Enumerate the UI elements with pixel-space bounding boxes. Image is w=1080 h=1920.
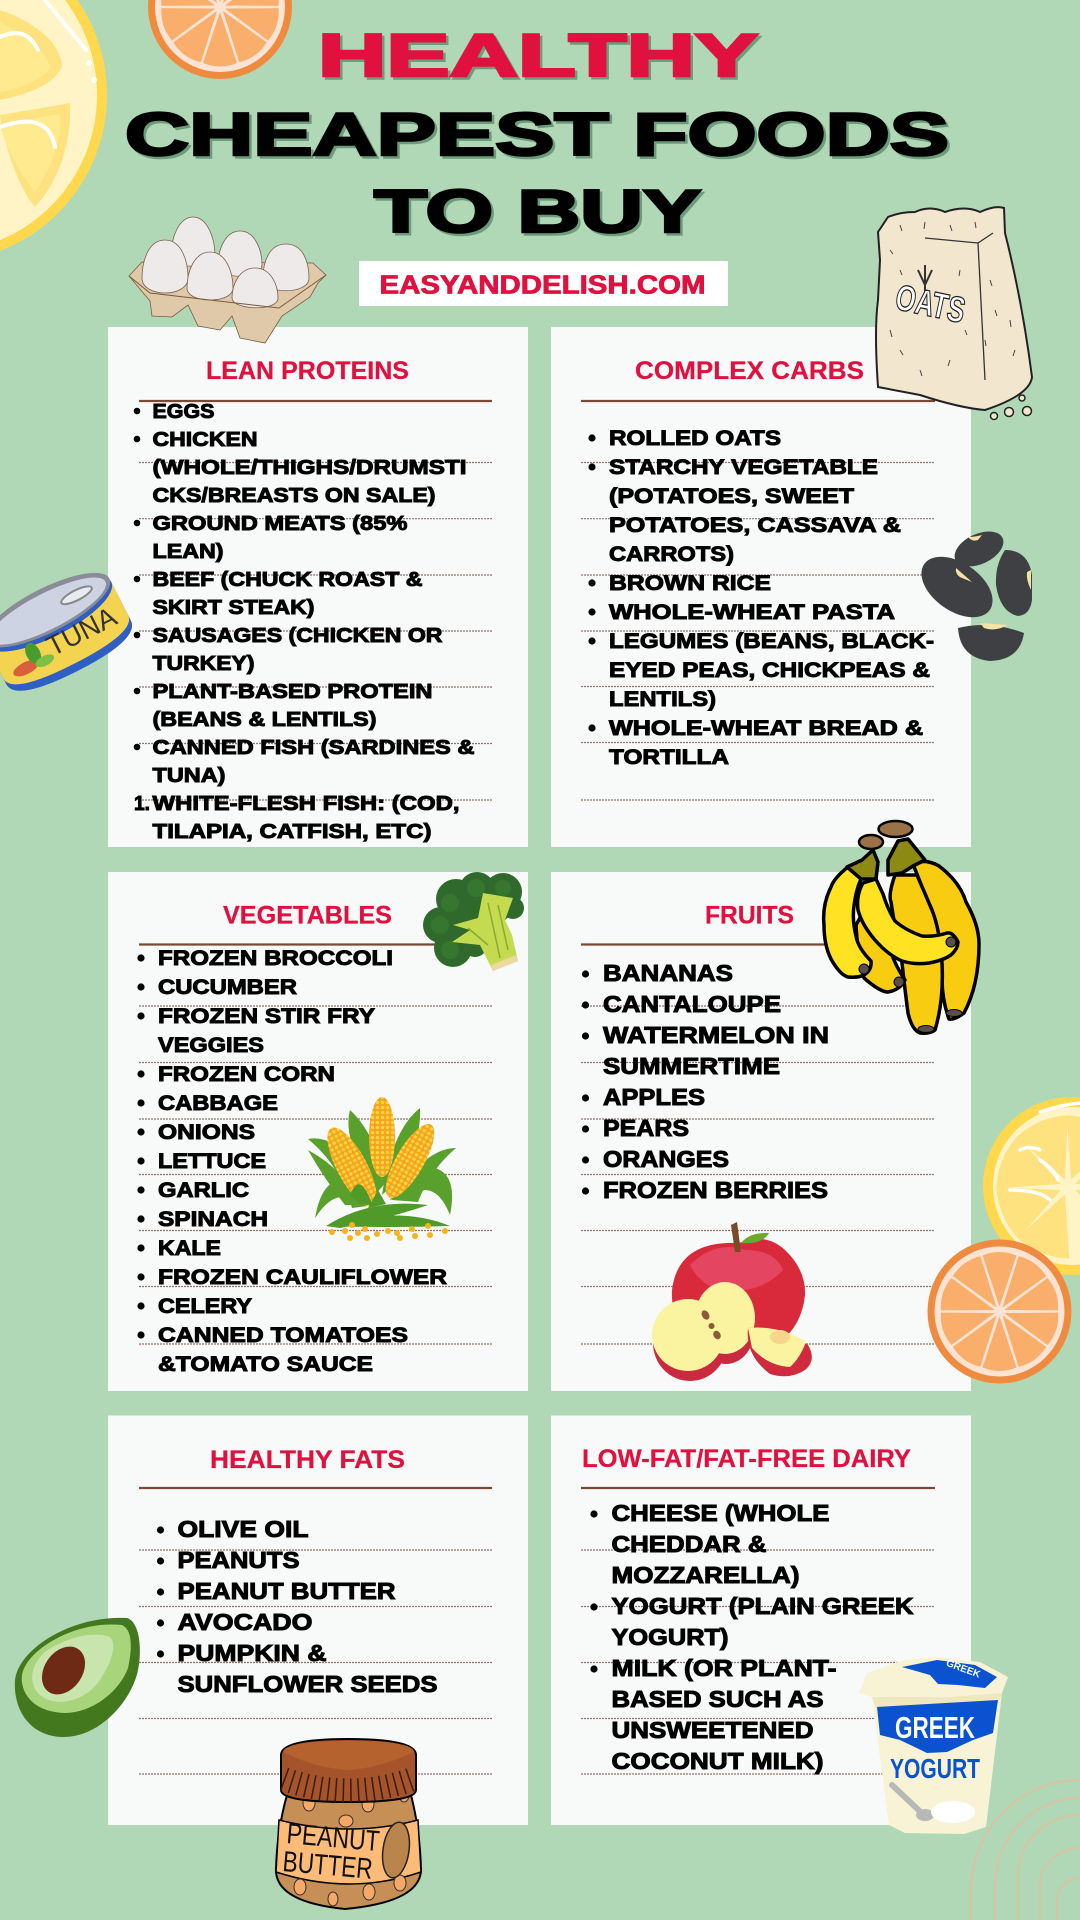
list: lean proteins: WHITE-FLESH FISH: (COD, (152, 792, 460, 815)
list: lean proteins: (WHOLE/THIGHS/DRUMSTI (152, 456, 466, 479)
list: fruits: APPLES (603, 1084, 705, 1110)
title: HEALTHY (320, 24, 760, 92)
list: lean proteins: SAUSAGES (CHICKEN OR (152, 624, 443, 647)
icon: peanut butter jar (276, 1739, 421, 1909)
icon: corn (308, 1097, 456, 1241)
list: lean proteins: TUNA) (152, 764, 226, 787)
list: complex carbs: TORTILLA (609, 745, 729, 769)
list: vegetables: LETTUCE (158, 1149, 266, 1173)
label: butter: BUTTER (281, 1846, 374, 1886)
list: lean proteins: TURKEY) (152, 652, 254, 675)
list: lean proteins: CKS/BREASTS ON SALE) (152, 484, 436, 507)
list: vegetables: FROZEN STIR FRY (158, 1004, 375, 1028)
list: healthy fats: AVOCADO (178, 1609, 312, 1635)
label: lid greek: GREEK (944, 1658, 982, 1681)
list: lean proteins: EGGS (152, 400, 214, 423)
list: complex carbs: CARROTS) (609, 542, 734, 566)
icon: orange slice right (928, 1240, 1072, 1384)
icon: orange slice top (148, 0, 292, 79)
list: low-fat dairy: COCONUT MILK) (612, 1748, 824, 1774)
list: low-fat dairy: BASED SUCH AS (612, 1686, 824, 1712)
list: low-fat dairy (590, 1500, 914, 1774)
list: fruits: WATERMELON IN (603, 1022, 829, 1048)
list: vegetables: &TOMATO SAUCE (158, 1352, 373, 1376)
list: vegetables: ONIONS (158, 1120, 255, 1144)
list: complex carbs: EYED PEAS, CHICKPEAS & (609, 658, 930, 682)
list: vegetables: SPINACH (158, 1207, 268, 1231)
list: vegetables: CANNED TOMATOES (158, 1323, 408, 1347)
list: lean proteins: 1. (134, 792, 150, 815)
list: vegetables: KALE (158, 1236, 221, 1260)
icon: egg carton (129, 217, 326, 343)
website badge: EASYANDDELISH.COM (380, 270, 706, 300)
panel: fruits (551, 872, 971, 1391)
list: low-fat dairy: MILK (OR PLANT- (612, 1655, 836, 1681)
list: low-fat dairy: UNSWEETENED (612, 1717, 814, 1743)
icon: broccoli (423, 872, 524, 971)
panel: vegetables (108, 872, 528, 1391)
list: complex carbs: LENTILS) (609, 687, 716, 711)
heading: fruits: FRUITS (705, 902, 794, 930)
label: peanut: PEANUT (285, 1818, 381, 1858)
icon: lemon slice top left (0, 0, 107, 262)
list: vegetables: CELERY (158, 1294, 252, 1318)
list: lean proteins: BEEF (CHUCK ROAST & (152, 568, 423, 591)
list: complex carbs: WHOLE-WHEAT PASTA (609, 600, 895, 624)
list: lean proteins: GROUND MEATS (85% (152, 512, 408, 535)
list: complex carbs: (POTATOES, SWEET (609, 484, 854, 508)
list: healthy fats: PEANUTS (178, 1547, 300, 1573)
label: oats: OATS (892, 276, 969, 331)
icon: avocado (15, 1618, 140, 1737)
heading: vegetables: VEGETABLES (223, 902, 392, 930)
list: low-fat dairy: YOGURT) (612, 1624, 728, 1650)
list: healthy fats: PEANUT BUTTER (178, 1578, 396, 1604)
list: complex carbs: WHOLE-WHEAT BREAD & (609, 716, 923, 740)
list: healthy fats (157, 1516, 438, 1697)
list: fruits: PEARS (603, 1115, 689, 1141)
title: CHEAPEST FOODS (125, 101, 949, 168)
list: lean proteins: PLANT-BASED PROTEIN (152, 680, 432, 703)
heading: lean proteins: LEAN PROTEINS (206, 357, 409, 385)
list: fruits: FROZEN BERRIES (603, 1177, 828, 1203)
list: vegetables: FROZEN CORN (158, 1062, 335, 1086)
label: greek: GREEK (895, 1710, 975, 1745)
list: fruits: SUMMERTIME (603, 1053, 780, 1079)
icon: black beans (910, 524, 1032, 661)
title (125, 22, 952, 248)
list: fruits (582, 960, 829, 1203)
icon: greek yogurt cup (859, 1657, 1008, 1834)
list: complex carbs: POTATOES, CASSAVA & (609, 513, 901, 537)
list: vegetables: FROZEN BROCCOLI (158, 946, 393, 970)
list: lean proteins: CANNED FISH (SARDINES & (152, 736, 475, 759)
list: lean proteins: (BEANS & LENTILS) (152, 708, 376, 731)
list: low-fat dairy: CHEDDAR & (612, 1531, 766, 1557)
list: low-fat dairy: YOGURT (PLAIN GREEK (612, 1593, 914, 1619)
website badge (359, 261, 728, 306)
title: TO BUY (376, 180, 704, 248)
decorative arcs (971, 1780, 1080, 1920)
list: vegetables (137, 946, 448, 1376)
list: lean proteins (134, 400, 475, 843)
list: vegetables: FROZEN CAULIFLOWER (158, 1265, 448, 1289)
title: CHEAPEST FOODS (128, 104, 952, 170)
list: healthy fats: PUMPKIN & (178, 1640, 326, 1666)
list: complex carbs: BROWN RICE (609, 571, 771, 595)
list: healthy fats: OLIVE OIL (178, 1516, 308, 1542)
list: fruits: CANTALOUPE (603, 991, 781, 1017)
icon: apple (652, 1222, 812, 1381)
label: tuna: TUNA (41, 601, 122, 662)
list: lean proteins: CHICKEN (152, 428, 258, 451)
list: lean proteins: SKIRT STEAK) (152, 596, 314, 619)
title: TO BUY (374, 178, 701, 245)
title: HEALTHY (318, 22, 758, 89)
heading: low-fat dairy: LOW-FAT/FAT-FREE DAIRY (582, 1445, 911, 1473)
heading: complex carbs: COMPLEX CARBS (635, 357, 864, 385)
list: low-fat dairy: MOZZARELLA) (612, 1562, 800, 1588)
list: complex carbs: STARCHY VEGETABLE (609, 455, 878, 479)
label: yogurt: YOGURT (890, 1753, 980, 1784)
list: fruits: BANANAS (603, 960, 733, 986)
list: vegetables: CABBAGE (158, 1091, 278, 1115)
icon: oats bag (876, 207, 1032, 420)
list: vegetables: GARLIC (158, 1178, 249, 1202)
list: vegetables: VEGGIES (158, 1033, 264, 1057)
list: complex carbs (588, 426, 934, 769)
list: complex carbs: ROLLED OATS (609, 426, 781, 450)
heading: healthy fats: HEALTHY FATS (210, 1446, 405, 1474)
icon: lemon slice right (983, 1097, 1080, 1275)
icon: tuna can (0, 559, 140, 703)
panel: healthy fats (108, 1416, 528, 1825)
list: low-fat dairy: CHEESE (WHOLE (612, 1500, 830, 1526)
panel: complex carbs (551, 327, 971, 847)
list: complex carbs: LEGUMES (BEANS, BLACK- (609, 629, 934, 653)
list: vegetables: CUCUMBER (158, 975, 298, 999)
list: lean proteins: LEAN) (152, 540, 224, 563)
icon: bananas (824, 821, 979, 1033)
panel: lean proteins (108, 327, 528, 847)
list: healthy fats: SUNFLOWER SEEDS (178, 1671, 438, 1697)
list: lean proteins: TILAPIA, CATFISH, ETC) (152, 820, 432, 843)
panel: low-fat dairy (551, 1416, 971, 1825)
list: fruits: ORANGES (603, 1146, 729, 1172)
